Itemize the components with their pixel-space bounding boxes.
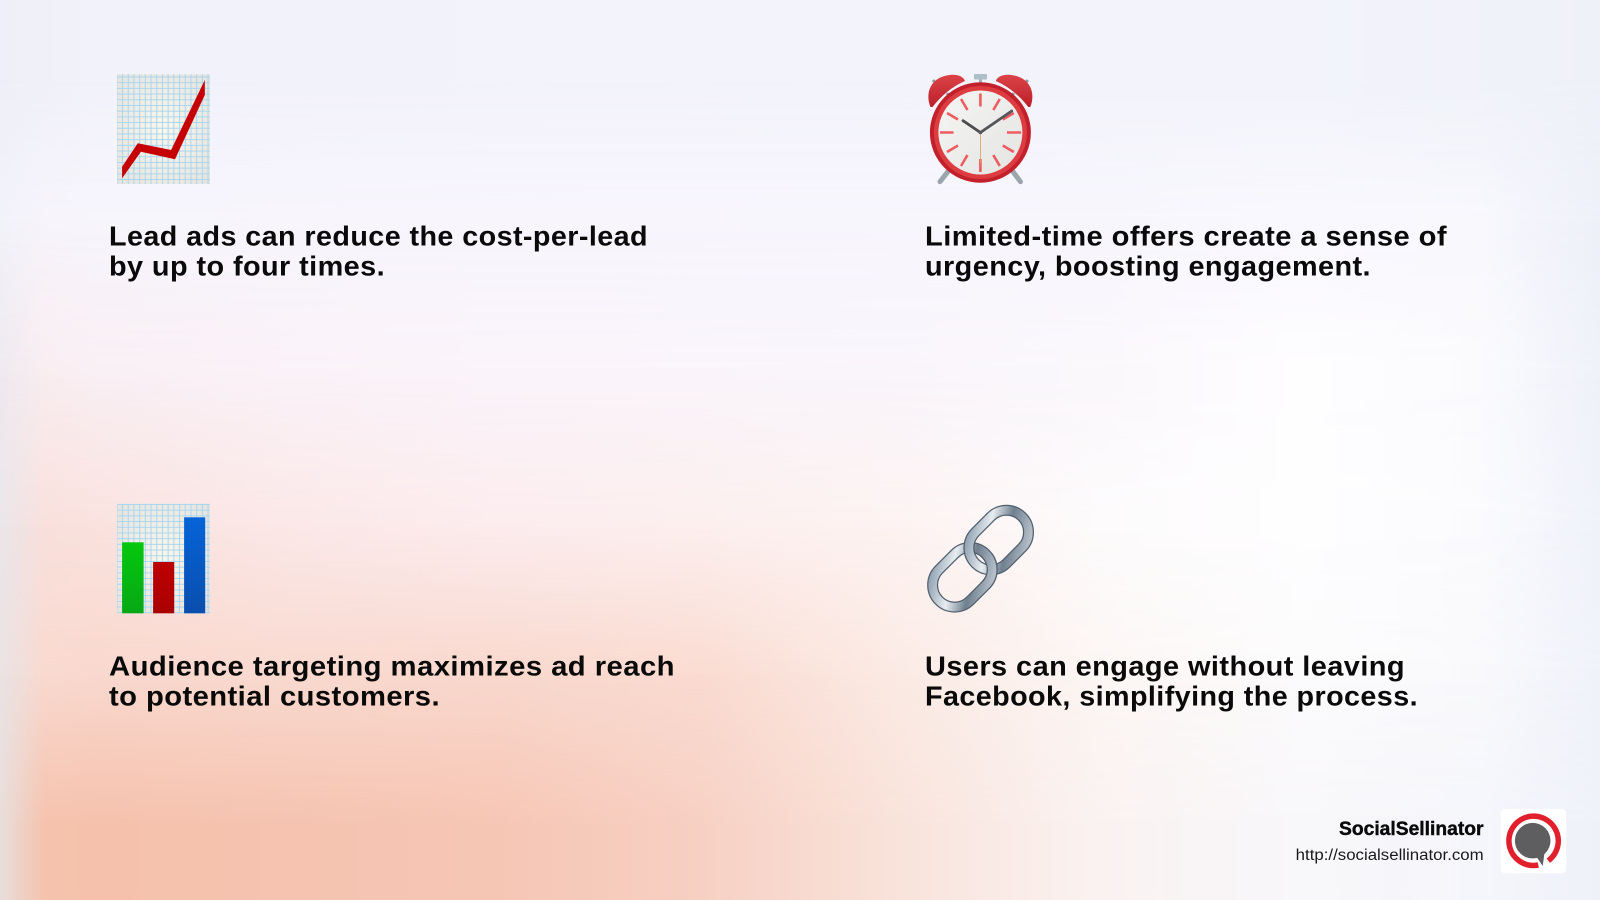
icon: alarm clock (928, 74, 1032, 183)
text: limited-time offers: Limited-time offers create a sense of (925, 221, 1447, 252)
text: limited-time offers: urgency, boosting engagement. (925, 251, 1371, 282)
panel: lead ads cost (109, 74, 648, 282)
panel: engage on Facebook (924, 501, 1418, 712)
brand url: http://socialsellinator.com (1296, 847, 1484, 864)
brand name: SocialSellinator (1339, 819, 1484, 840)
footer: brand (1296, 809, 1566, 873)
icon: rising line chart (117, 74, 210, 184)
text: engage on Facebook: Users can engage without leaving (925, 651, 1405, 682)
text: lead ads: Lead ads can reduce the cost-per-lead (109, 221, 648, 252)
icon: chain links (927, 504, 1034, 613)
text: lead ads: by up to four times. (109, 251, 385, 282)
icon: bar chart (117, 504, 210, 613)
panel: audience targeting (109, 504, 675, 712)
logo (1501, 809, 1566, 873)
text: audience targeting: to potential customers. (109, 681, 440, 712)
text: audience targeting: Audience targeting maximizes ad reach (109, 651, 675, 682)
panel: limited-time offers (925, 74, 1447, 282)
text: engage on Facebook: Facebook, simplifying the process. (925, 681, 1418, 712)
